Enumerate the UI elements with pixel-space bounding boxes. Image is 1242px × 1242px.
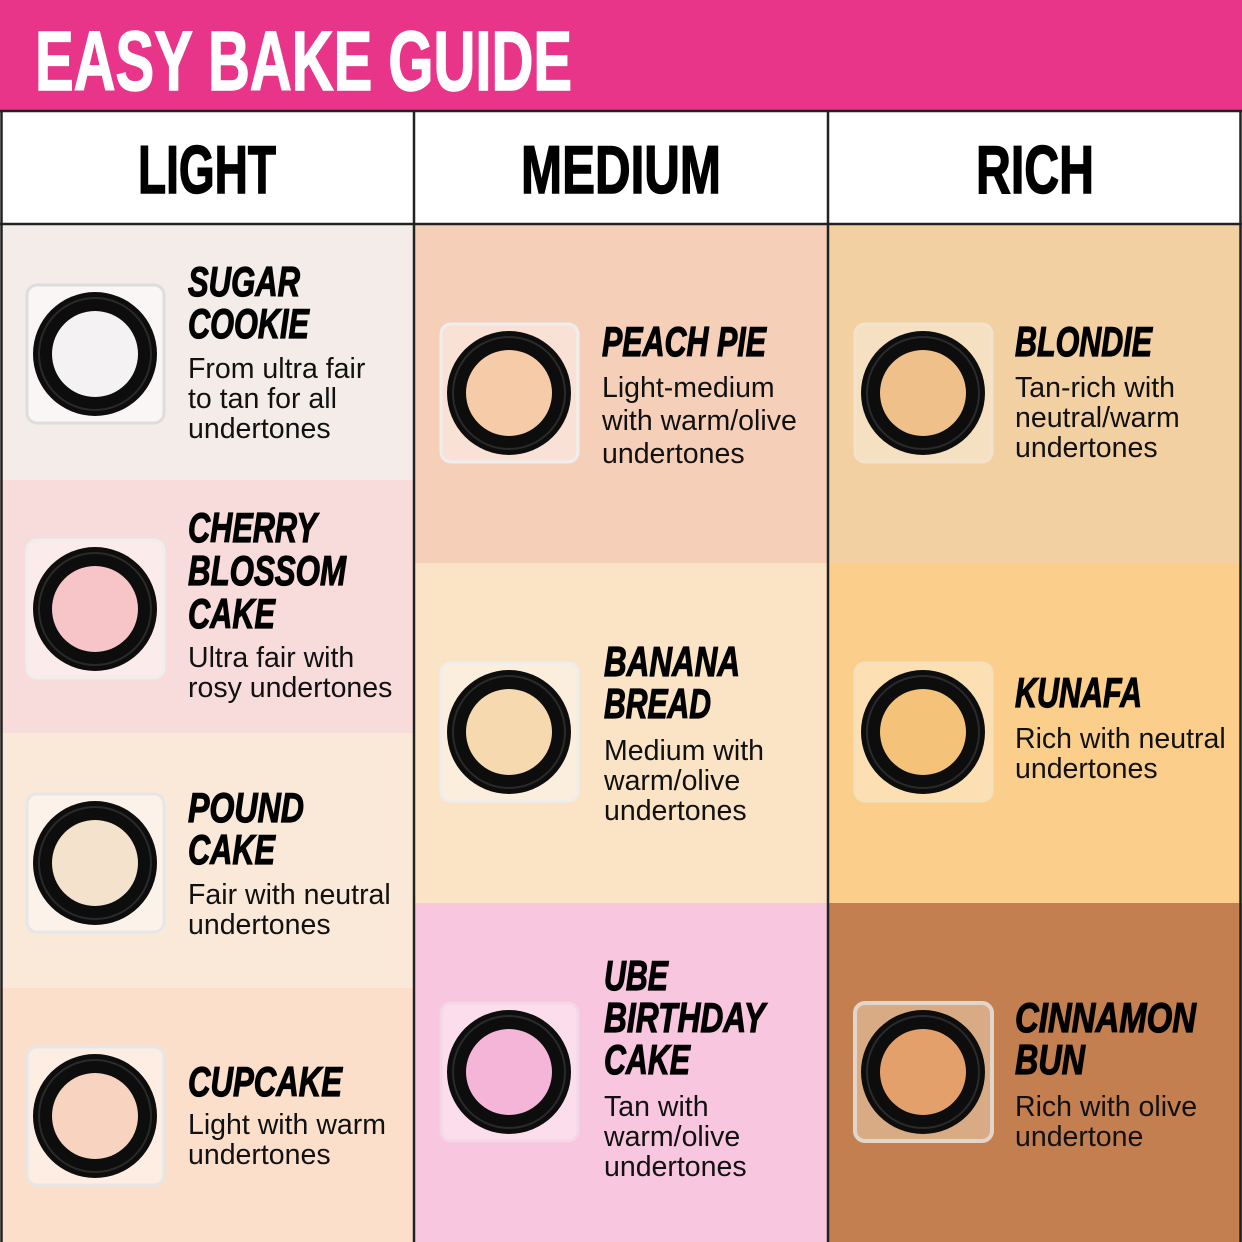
- text: ube birthday cake: undertones: [604, 1151, 747, 1183]
- text: banana bread: warm/olive: [603, 765, 740, 797]
- heading: medium: MEDIUM: [521, 132, 721, 208]
- text: banana bread: BANANA: [604, 638, 740, 685]
- panel: blondie: [855, 318, 1180, 464]
- text: sugar cookie: COOKIE: [188, 300, 310, 347]
- text: cherry blossom cake: CAKE: [188, 590, 276, 637]
- panel: peach pie: [441, 318, 797, 470]
- text: banana bread: undertones: [604, 795, 747, 827]
- heading: light: LIGHT: [138, 132, 276, 208]
- heading: rich: RICH: [976, 132, 1094, 208]
- panel: cupcake: [27, 1047, 386, 1185]
- text: sugar cookie: [188, 258, 366, 445]
- text: kunafa: Rich with neutral: [1015, 723, 1226, 755]
- text: ube birthday cake: BIRTHDAY: [604, 994, 768, 1041]
- text: cupcake: undertones: [188, 1139, 331, 1171]
- text: peach pie: PEACH PIE: [602, 318, 767, 365]
- text: kunafa: undertones: [1015, 753, 1158, 785]
- text: blondie: neutral/warm: [1015, 402, 1180, 434]
- icon: banana bread powder: [441, 663, 578, 801]
- text: peach pie: [601, 318, 797, 470]
- text: peach pie: with warm/olive: [601, 405, 797, 437]
- text: peach pie: undertones: [602, 438, 745, 470]
- text: blondie: BLONDIE: [1015, 318, 1153, 365]
- text: sugar cookie: to tan for all: [188, 383, 337, 415]
- text: cherry blossom cake: CHERRY: [188, 504, 320, 551]
- text: blondie: Tan-rich with: [1015, 372, 1175, 404]
- text: banana bread: [603, 638, 764, 827]
- text: ube birthday cake: CAKE: [604, 1036, 691, 1083]
- text: cherry blossom cake: Ultra fair with: [188, 642, 354, 674]
- text: banana bread: BREAD: [604, 680, 711, 727]
- text: blondie: undertones: [1015, 432, 1158, 464]
- text: banana bread: Medium with: [604, 735, 764, 767]
- text: sugar cookie: undertones: [188, 413, 331, 445]
- icon: peach pie powder: [441, 324, 578, 462]
- icon: sugar cookie powder: [27, 285, 164, 423]
- text: ube birthday cake: warm/olive: [603, 1121, 740, 1153]
- text: pound cake: Fair with neutral: [188, 879, 391, 911]
- panel: banana bread: [441, 638, 764, 827]
- panel: sugar cookie: [27, 258, 366, 445]
- icon: pound cake powder: [27, 794, 164, 932]
- text: sugar cookie: SUGAR: [188, 258, 300, 305]
- text: cherry blossom cake: [188, 504, 392, 704]
- text: kunafa: [1015, 669, 1226, 785]
- text: peach pie: Light-medium: [602, 372, 775, 404]
- icon: ube powder: [441, 1003, 578, 1141]
- text: pound cake: CAKE: [188, 826, 276, 873]
- icon: blondie powder: [855, 324, 992, 462]
- text: cherry blossom cake: BLOSSOM: [188, 547, 347, 594]
- panel: kunafa: [855, 663, 1226, 801]
- icon: cherry blossom powder: [27, 540, 164, 678]
- icon: cupcake powder: [27, 1047, 164, 1185]
- text: ube birthday cake: UBE: [604, 952, 669, 999]
- text: cupcake: Light with warm: [188, 1109, 386, 1141]
- text: pound cake: undertones: [188, 909, 331, 941]
- column header row: [0, 111, 1242, 224]
- text: blondie: [1015, 318, 1180, 464]
- text: cupcake: [188, 1058, 386, 1171]
- text: kunafa: KUNAFA: [1015, 669, 1142, 716]
- text: cinnamon bun: CINNAMON: [1015, 994, 1197, 1041]
- text: ube birthday cake: [603, 952, 768, 1183]
- icon: cinnamon bun powder: [855, 1003, 992, 1141]
- panel: cherry blossom cake: [27, 504, 392, 704]
- header banner: [0, 0, 1242, 111]
- text: sugar cookie: From ultra fair: [188, 353, 366, 385]
- title: EASY BAKE GUIDE: [35, 14, 572, 108]
- panel: pound cake: [27, 784, 391, 941]
- text: ube birthday cake: Tan with: [604, 1091, 709, 1123]
- panel: cinnamon bun: [855, 994, 1197, 1153]
- text: pound cake: [188, 784, 391, 941]
- text: pound cake: POUND: [188, 784, 304, 831]
- text: cupcake: CUPCAKE: [188, 1058, 343, 1105]
- text: cinnamon bun: [1015, 994, 1197, 1153]
- icon: kunafa powder: [855, 663, 992, 801]
- text: cherry blossom cake: rosy undertones: [188, 672, 392, 704]
- panel: ube birthday cake: [441, 952, 768, 1183]
- text: cinnamon bun: BUN: [1015, 1036, 1086, 1083]
- text: cinnamon bun: undertone: [1015, 1121, 1143, 1153]
- text: cinnamon bun: Rich with olive: [1015, 1091, 1197, 1123]
